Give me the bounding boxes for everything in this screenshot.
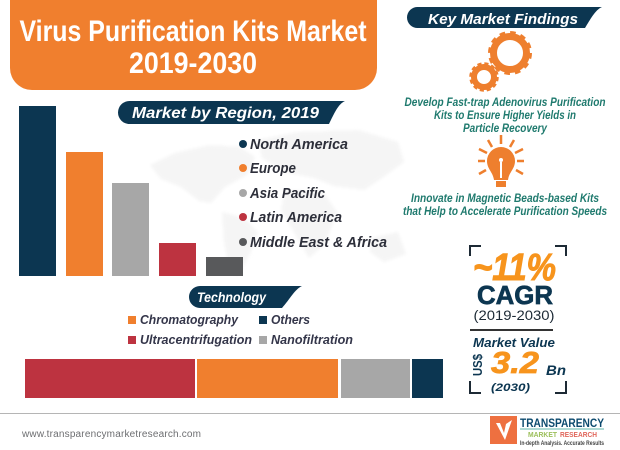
region legend bbox=[239, 136, 387, 251]
title panel: 2019-2030 bbox=[129, 47, 257, 80]
heading: key market findings: Key Market Findings bbox=[428, 11, 578, 28]
heading: market by region: Market by Region, 2019 bbox=[132, 105, 319, 122]
website url: www.transparencymarketresearch.com bbox=[21, 429, 201, 440]
stat: CAGR years: (2019-2030) bbox=[474, 307, 554, 323]
legend: Ultracentrifugation: Ultracentrifugation bbox=[140, 332, 252, 347]
stacked bar: technology share bbox=[25, 359, 443, 398]
icon: light bulb bbox=[478, 135, 524, 187]
finding text: adenovirus purification: Kits to Ensure Higher Yields in bbox=[434, 108, 576, 122]
stat: market value year: (2030) bbox=[491, 382, 530, 394]
legend: Chromatography: Chromatography bbox=[140, 312, 239, 327]
world map background bbox=[150, 130, 406, 276]
callout: CAGR and market value bbox=[470, 246, 566, 394]
heading: technology bbox=[189, 286, 302, 308]
logo: Transparency Market Research: TRANSPARENCY bbox=[520, 416, 604, 430]
heading: key market findings bbox=[407, 7, 602, 28]
logo: Transparency Market Research: In-depth Analysis. Accurate Results bbox=[520, 441, 605, 447]
stat: unit: Bn bbox=[546, 362, 566, 378]
technology legend bbox=[128, 312, 353, 347]
stat: market value: 3.2 bbox=[491, 345, 539, 380]
bar: Middle East and Africa bbox=[206, 257, 243, 276]
legend: Others: Others bbox=[271, 312, 310, 327]
legend: Asia Pacific: Asia Pacific bbox=[249, 185, 326, 202]
bar: Europe bbox=[66, 152, 103, 276]
stat: CAGR label: CAGR bbox=[477, 280, 553, 310]
stat: market value label: Market Value bbox=[473, 335, 555, 350]
bar: Asia Pacific bbox=[112, 183, 149, 276]
logo: Transparency Market Research: MARKET bbox=[528, 430, 557, 439]
bar: North America bbox=[19, 106, 56, 276]
finding text: magnetic beads bbox=[403, 191, 607, 218]
heading: technology: Technology bbox=[197, 289, 267, 305]
title panel: Virus Purification Kits Market bbox=[20, 15, 367, 48]
legend: Europe: Europe bbox=[250, 160, 296, 177]
heading: market by region bbox=[118, 101, 345, 124]
stat: currency: US$ bbox=[470, 353, 485, 376]
logo: Transparency Market Research: RESEARCH bbox=[560, 430, 597, 439]
logo: Transparency Market Research bbox=[490, 416, 605, 447]
stat: CAGR percentage: ~11% bbox=[473, 247, 556, 289]
legend: Latin America: Latin America bbox=[250, 209, 342, 226]
legend: Middle East and Africa: Middle East & Africa bbox=[250, 234, 387, 251]
legend: North America: North America bbox=[250, 136, 348, 153]
bar chart: market by region bbox=[19, 106, 243, 276]
bar: Latin America bbox=[159, 243, 196, 276]
finding text: adenovirus purification bbox=[404, 95, 606, 135]
legend: Nanofiltration: Nanofiltration bbox=[271, 332, 353, 347]
title panel bbox=[10, 0, 377, 90]
icon: gears bbox=[471, 33, 530, 90]
finding text: adenovirus purification: Particle Recovery bbox=[463, 121, 548, 135]
